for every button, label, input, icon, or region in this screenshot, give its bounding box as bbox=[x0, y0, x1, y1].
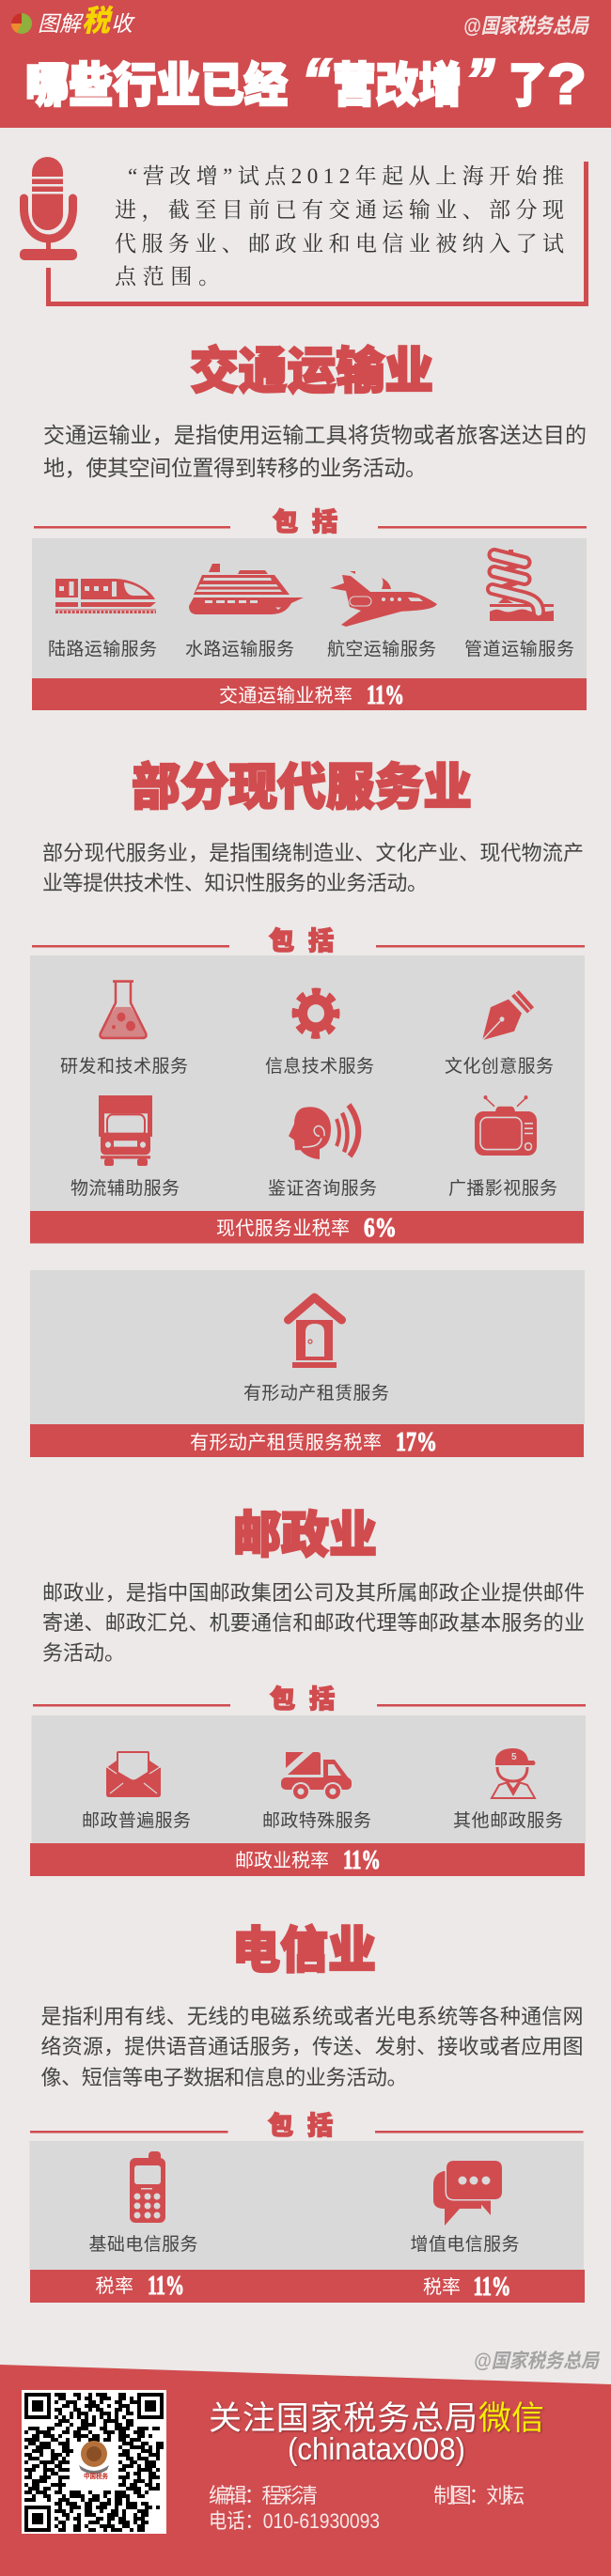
icon: mobile phone bbox=[130, 2151, 165, 2223]
account name: @国家税务总局 bbox=[463, 14, 590, 38]
labels bbox=[60, 1056, 557, 1199]
labels: 物流辅助服务 bbox=[70, 1178, 180, 1199]
labels bbox=[82, 1810, 563, 1831]
labels: 增值电信服务 bbox=[410, 2234, 519, 2255]
labels: 航空运输服务 bbox=[327, 639, 436, 660]
heading: 部分现代服务业 bbox=[132, 760, 472, 815]
tax bar: 邮政业税率 bbox=[235, 1850, 329, 1871]
labels: 管道运输服务 bbox=[464, 639, 574, 660]
logo text bbox=[38, 4, 135, 38]
description: 络资源，提供语音通话服务，传送、发射、接收或者应用图 bbox=[41, 2035, 583, 2058]
title: “ bbox=[302, 48, 331, 113]
description: 交通运输业，是指使用运输工具将货物或者旅客送达目的 bbox=[43, 423, 587, 447]
tax bar: 交通运输业税率 bbox=[219, 685, 352, 706]
labels: 研发和技术服务 bbox=[60, 1056, 188, 1077]
logo text: 图解 bbox=[38, 11, 84, 36]
intro bracket bbox=[49, 162, 587, 304]
logo: pie chart bbox=[11, 13, 32, 34]
icon: television bbox=[475, 1095, 537, 1156]
credits: 制图：刘耘 bbox=[433, 2484, 525, 2507]
title: ” bbox=[465, 48, 494, 113]
logo text: 税 bbox=[82, 4, 114, 38]
section: 交通运输业 bbox=[32, 344, 587, 710]
labels: 水路运输服务 bbox=[185, 639, 294, 660]
tax bar: 税率 bbox=[423, 2276, 461, 2298]
tax bar: 11% bbox=[367, 681, 404, 710]
icon: ship bbox=[189, 564, 304, 614]
icon: courier bbox=[492, 1748, 536, 1798]
tax bar bbox=[30, 2270, 585, 2303]
section: 部分现代服务业 bbox=[30, 760, 585, 1244]
tax bar: 现代服务业税率 bbox=[216, 1218, 350, 1239]
description bbox=[42, 842, 584, 894]
label: 有形动产租赁服务 bbox=[243, 1383, 389, 1404]
icon: plane bbox=[330, 571, 437, 627]
tax bar bbox=[30, 1424, 584, 1457]
description: 邮政业，是指中国邮政集团公司及其所属邮政企业提供邮件 bbox=[42, 1581, 585, 1605]
description bbox=[41, 2005, 583, 2089]
includes divider: 包括 bbox=[269, 927, 334, 955]
includes divider: 包括 bbox=[268, 2112, 333, 2140]
panel: 有形动产租赁服务 bbox=[30, 1270, 585, 1457]
labels: 鉴证咨询服务 bbox=[268, 1178, 377, 1199]
header banner bbox=[0, 0, 611, 128]
labels bbox=[88, 2234, 519, 2255]
QR centre emblem bbox=[79, 2441, 109, 2480]
labels: 广播影视服务 bbox=[448, 1178, 557, 1199]
tax bar: 11% bbox=[148, 2272, 184, 2301]
heading: 邮政业 bbox=[233, 1508, 377, 1563]
labels: 基础电信服务 bbox=[88, 2234, 197, 2255]
section: 邮政业 bbox=[30, 1508, 586, 1876]
intro text bbox=[115, 164, 564, 288]
tax bar bbox=[32, 678, 587, 710]
description bbox=[43, 423, 587, 480]
labels: 信息技术服务 bbox=[265, 1056, 374, 1077]
icon: house bbox=[288, 1297, 342, 1368]
credits: 电话：010-61930093 bbox=[209, 2509, 380, 2533]
tax bar bbox=[30, 1211, 584, 1244]
description bbox=[42, 1581, 585, 1665]
panel: services bbox=[32, 538, 587, 678]
panel: services bbox=[30, 2141, 584, 2270]
icon: pipeline bbox=[488, 549, 554, 621]
icon: envelope bbox=[106, 1751, 161, 1797]
panel: services bbox=[32, 1715, 586, 1843]
credits: 编辑：程彩清 bbox=[209, 2484, 318, 2507]
description: 务活动。 bbox=[42, 1641, 125, 1665]
description: 像、短信等电子数据和信息的业务活动。 bbox=[41, 2066, 408, 2089]
tax bar bbox=[30, 1843, 585, 1876]
intro text: 代服务业、邮政业和电信业被纳入了试 bbox=[115, 232, 564, 256]
tax bar: 有形动产租赁服务税率 bbox=[190, 1432, 382, 1453]
intro text: 点范围。 bbox=[115, 265, 220, 288]
tax bar: 6% bbox=[364, 1214, 397, 1243]
footer account name: @国家税务总局 bbox=[474, 2350, 601, 2372]
follow text: (chinatax008) bbox=[288, 2431, 465, 2466]
title bbox=[25, 48, 587, 116]
icon: microphone bbox=[20, 157, 77, 260]
icon: gear bbox=[292, 988, 339, 1038]
logo text: 收 bbox=[111, 11, 135, 36]
title: 哪些行业已经 bbox=[25, 59, 288, 112]
labels: 文化创意服务 bbox=[445, 1056, 554, 1077]
icon: fountain pen bbox=[482, 990, 534, 1040]
title: 营改增 bbox=[333, 59, 462, 112]
heading: 电信业 bbox=[232, 1923, 376, 1979]
intro text: “营改增”试点2012年起从上海开始推 bbox=[128, 164, 564, 188]
credits bbox=[209, 2484, 525, 2533]
tax bar: 11% bbox=[343, 1846, 381, 1875]
follow text: 微信 bbox=[478, 2400, 544, 2437]
icon: courier: 5 bbox=[511, 1752, 517, 1762]
heading: 交通运输业 bbox=[190, 344, 433, 399]
icon: speaking head bbox=[289, 1105, 358, 1159]
footer bbox=[0, 2365, 611, 2576]
labels: 其他邮政服务 bbox=[453, 1810, 563, 1831]
section: 电信业 bbox=[30, 1923, 585, 2303]
description: 寄递、邮政汇兑、机要通信和邮政代理等邮政基本服务的业 bbox=[42, 1611, 585, 1635]
description: 地，使其空间位置得到转移的业务活动。 bbox=[43, 456, 427, 480]
icon: train bbox=[55, 579, 156, 613]
labels: 邮政特殊服务 bbox=[262, 1810, 371, 1831]
includes divider: 包括 bbox=[273, 508, 337, 536]
QR centre emblem: 中国税务 bbox=[84, 2472, 108, 2480]
QR code bbox=[22, 2390, 166, 2534]
intro text: 进，截至目前已有交通运输业、部分现 bbox=[115, 198, 564, 223]
tax bar: 11% bbox=[474, 2273, 511, 2302]
tax bar: 17% bbox=[396, 1428, 437, 1457]
description: 业等提供技术性、知识性服务的业务活动。 bbox=[42, 872, 428, 894]
icon: delivery van bbox=[281, 1752, 352, 1801]
labels: 邮政普遍服务 bbox=[82, 1810, 191, 1831]
panel: services bbox=[30, 955, 585, 1211]
follow text: 关注国家税务总局 bbox=[209, 2400, 478, 2437]
labels bbox=[48, 639, 574, 660]
includes divider: 包括 bbox=[270, 1685, 335, 1714]
icon: chat bubbles bbox=[433, 2161, 502, 2226]
description: 是指利用有线、无线的电磁系统或者光电系统等各种通信网 bbox=[41, 2005, 583, 2028]
tax bar: 税率 bbox=[96, 2275, 133, 2297]
icon: flask bbox=[100, 982, 147, 1038]
labels: 陆路运输服务 bbox=[48, 639, 157, 660]
icon: truck bbox=[99, 1095, 152, 1166]
description: 部分现代服务业，是指围绕制造业、文化产业、现代物流产 bbox=[42, 842, 584, 864]
follow text bbox=[209, 2400, 544, 2466]
title: 了 bbox=[509, 59, 546, 112]
title: ? bbox=[547, 53, 587, 116]
